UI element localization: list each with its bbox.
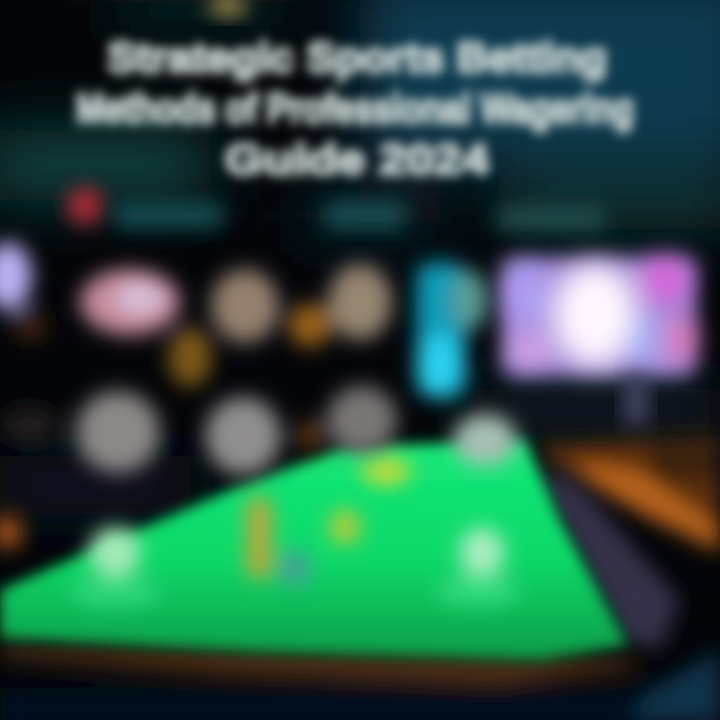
green table	[0, 440, 628, 660]
left edge orange marker	[0, 514, 23, 550]
title	[76, 34, 634, 184]
table markers	[70, 456, 520, 606]
lower row of circles	[0, 386, 517, 475]
title: Guide 2024	[225, 136, 489, 184]
cyan pillar	[416, 262, 488, 398]
upper row of circles	[0, 242, 392, 387]
colorful screen	[503, 258, 695, 425]
bottom rail	[0, 645, 720, 720]
title: Strategic Sports Betting	[107, 34, 607, 82]
teal labels	[115, 202, 605, 229]
top gold light	[208, 0, 248, 16]
side rail	[535, 470, 680, 650]
wooden side panel	[535, 435, 720, 555]
red badge icon	[66, 187, 104, 225]
